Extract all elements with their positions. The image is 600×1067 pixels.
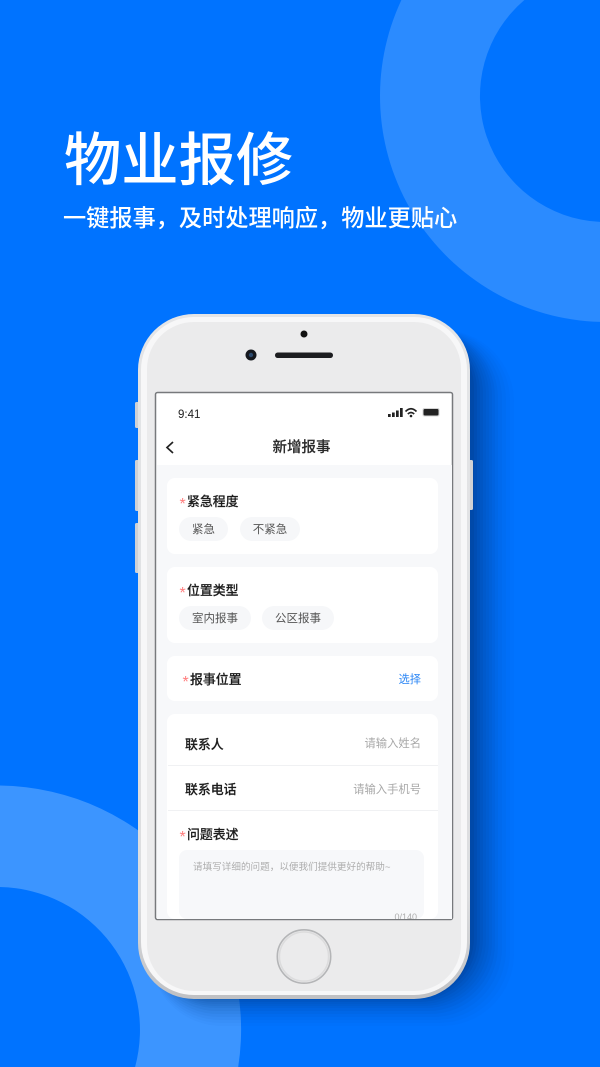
card: location type: * [180, 585, 186, 602]
card: contact form: 联系电话 [185, 782, 237, 797]
card: contact form: 问题表述 [187, 827, 239, 842]
card: location type: 室内报事 [192, 611, 238, 625]
card: urgency: 不紧急 [253, 522, 287, 536]
card: contact form [180, 737, 420, 919]
card: report location: 选择 [399, 672, 421, 686]
home button [277, 930, 331, 983]
card: location type: 位置类型 [187, 583, 239, 598]
card: urgency [180, 494, 287, 534]
card: report location [182, 672, 420, 686]
phone shadow [150, 330, 514, 1026]
screen frame [156, 392, 452, 920]
decorative ring: top right [380, 0, 600, 322]
card: report location: 报事位置 [190, 672, 242, 687]
card: urgency: 紧急程度 [187, 494, 239, 509]
nav bar [166, 439, 330, 454]
card: urgency: * [180, 496, 186, 513]
status bar: 9:41 [178, 409, 200, 421]
title: 物业报修 [64, 129, 293, 193]
nav bar: 新增报事 [272, 438, 330, 456]
card: contact form: * [180, 829, 186, 846]
card: contact form: 请输入姓名 [364, 736, 421, 750]
card: report location: * [182, 674, 189, 691]
card: contact form: 请输入手机号 [353, 782, 421, 796]
phone body [138, 314, 470, 999]
phone [135, 314, 514, 1026]
card: urgency: 紧急 [192, 522, 215, 536]
card: location type [180, 584, 320, 624]
earpiece and camera [246, 330, 333, 360]
app screen [157, 408, 452, 922]
card: contact form: 0/140 [394, 912, 417, 922]
card: location type: 公区报事 [275, 611, 321, 625]
decorative ring: bottom left [0, 786, 241, 1067]
side buttons [135, 402, 473, 573]
card: contact form: 联系人 [185, 737, 224, 752]
subtitle: 一键报事，及时处理响应，物业更贴心 [63, 205, 457, 231]
card: contact form: 请填写详细的问题，以便我们提供更好的帮助~ [193, 861, 391, 873]
status bar [178, 408, 440, 418]
